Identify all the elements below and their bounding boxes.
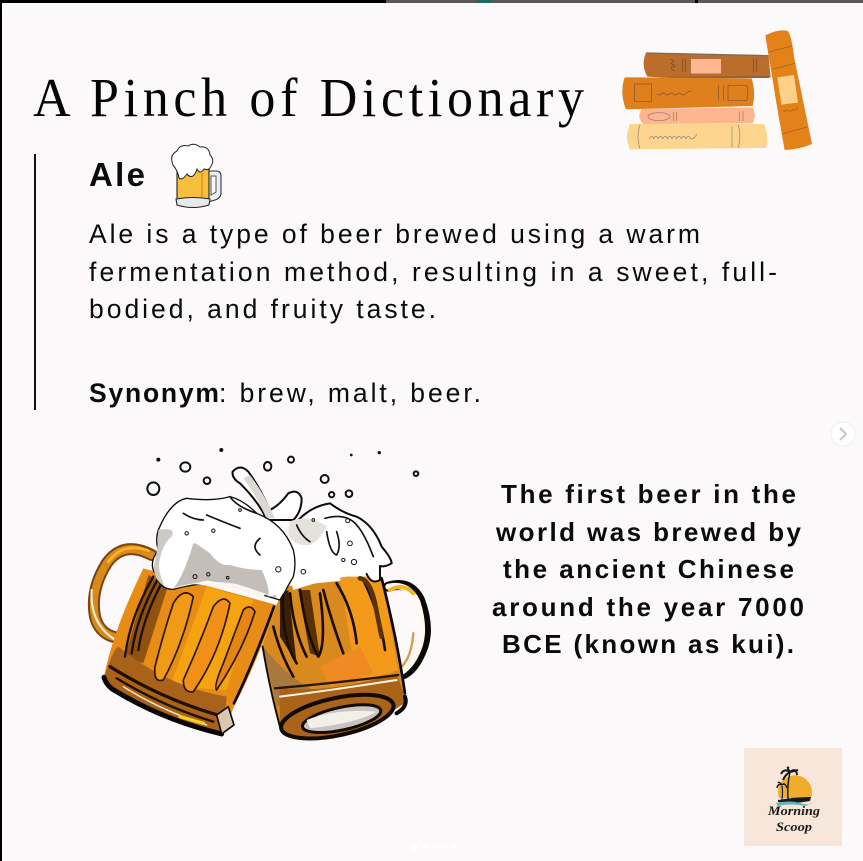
vertical rule bbox=[34, 154, 36, 410]
icon: stack of books bbox=[622, 30, 812, 150]
did-you-know fact bbox=[492, 479, 804, 659]
illustration: clinking beer mugs bbox=[92, 448, 426, 747]
left mug body bbox=[104, 568, 277, 734]
icon: small beer mug bbox=[172, 144, 221, 208]
logo: Morning Scoop: Morning bbox=[767, 804, 820, 818]
carousel next arrow bbox=[831, 422, 855, 446]
did-you-know fact: around the year 7000 bbox=[492, 592, 804, 622]
foam bubbles bbox=[185, 509, 357, 579]
left handle bbox=[92, 548, 152, 643]
did-you-know fact: the ancient Chinese bbox=[503, 554, 794, 584]
definition text: Ale is a type of beer brewed using a warm bbox=[89, 219, 700, 249]
synonym line: : brew, malt, beer. bbox=[219, 378, 481, 408]
did-you-know fact: world was brewed by bbox=[495, 517, 802, 547]
did-you-know fact: The first beer in the bbox=[501, 479, 796, 509]
did-you-know fact: BCE (known as kui). bbox=[502, 629, 794, 659]
heading: Ale: Ale bbox=[89, 156, 145, 193]
definition text: fermentation method, resulting in a sweet, full- bbox=[89, 257, 777, 287]
carousel dots bbox=[412, 844, 457, 850]
left foam bbox=[152, 497, 295, 600]
right handle bbox=[388, 585, 426, 675]
logo: Morning Scoop: Scoop bbox=[776, 820, 812, 834]
right mug body bbox=[262, 577, 406, 739]
definition text bbox=[89, 219, 777, 324]
splash bbox=[233, 467, 302, 520]
title: A Pinch of Dictionary bbox=[33, 67, 584, 128]
synonym line bbox=[89, 378, 481, 408]
synonym line: Synonym bbox=[89, 378, 219, 408]
flying bubbles bbox=[147, 457, 418, 497]
logo: Morning Scoop bbox=[744, 748, 842, 846]
right foam bbox=[288, 503, 392, 590]
definition text: bodied, and fruity taste. bbox=[89, 294, 436, 324]
